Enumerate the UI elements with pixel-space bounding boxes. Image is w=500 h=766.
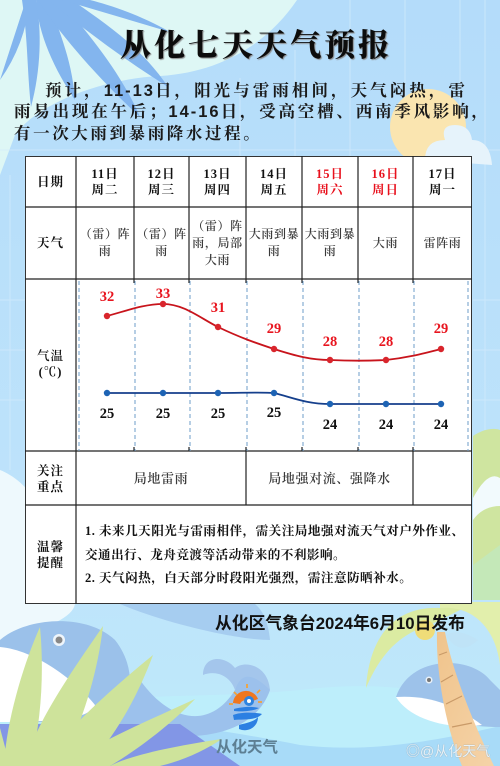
row: key focus xyxy=(37,464,391,494)
row: tips xyxy=(37,524,464,585)
row: tips: 1. 未来几天阳光与雷雨相伴，需关注局地强对流天气对户外作业、 xyxy=(85,524,464,538)
high temperature line: 28 xyxy=(323,334,337,350)
low temperature line: 24 xyxy=(379,417,393,433)
row: weather: 天气 xyxy=(37,236,64,250)
row: weather: （雷）阵雨 xyxy=(80,227,130,258)
high temperature line: 31 xyxy=(211,300,225,316)
palm leaf top left xyxy=(0,0,170,117)
issuer line: 从化区气象台2024年6月10日发布 xyxy=(215,614,465,633)
row: weather: 雷阵雨 xyxy=(424,236,461,250)
lower waves xyxy=(0,686,500,766)
row: weather: （雷）阵雨，局部大雨 xyxy=(192,218,243,266)
low temperature line: 25 xyxy=(211,406,225,422)
row label: temperature xyxy=(37,349,64,379)
watermark: ◎@从化天气 xyxy=(406,743,490,759)
row: key focus: 局地强对流、强降水 xyxy=(268,471,391,486)
row: date: 周二 xyxy=(91,182,118,196)
intro text: 雨易出现在午后；14-16日，受高空槽、西南季风影响， xyxy=(14,102,491,121)
intro text xyxy=(14,81,491,143)
agave leaves xyxy=(0,626,222,766)
row: tips: 温馨 xyxy=(37,540,64,554)
row: weather xyxy=(37,218,461,266)
row: date: 周六 xyxy=(316,182,344,196)
high temperature line: 33 xyxy=(156,286,170,302)
row: date: 周四 xyxy=(204,182,231,196)
intro text: 有一次大雨到暴雨降水过程。 xyxy=(14,124,262,143)
whale right xyxy=(396,663,500,727)
high temperature line: 29 xyxy=(267,321,281,337)
low temperature line: 24 xyxy=(323,417,337,433)
temperature line chart xyxy=(100,286,448,433)
high temperature line: 29 xyxy=(434,321,448,337)
left white dome xyxy=(0,470,75,640)
intro text: 预计，11-13日，阳光与雷雨相间，天气闷热，雷 xyxy=(45,81,468,100)
row: date: 日期 xyxy=(37,174,64,188)
row: date: 周日 xyxy=(372,182,399,196)
row: key focus: 关注 xyxy=(37,464,64,478)
low temperature line: 25 xyxy=(156,406,170,422)
row: date: 15日 xyxy=(316,166,344,180)
row: date xyxy=(37,166,456,196)
palm tree xyxy=(366,602,500,766)
logo icon xyxy=(229,684,262,730)
row: date: 12日 xyxy=(147,166,176,180)
row: tips: 提醒 xyxy=(37,556,64,570)
row: weather: 大雨到暴雨 xyxy=(305,227,355,258)
sun xyxy=(390,89,466,165)
row: date: 16日 xyxy=(371,166,400,180)
logo text: 从化天气 xyxy=(216,739,278,756)
pale corner shape xyxy=(0,0,297,175)
row: date: 17日 xyxy=(428,166,456,180)
cloud top right xyxy=(425,125,492,165)
forecast table xyxy=(25,156,472,604)
row: tips: 2. 天气闷热，白天部分时段阳光强烈，需注意防晒补水。 xyxy=(85,571,412,585)
low temperature line xyxy=(100,390,448,433)
low temperature line: 25 xyxy=(100,406,114,422)
title: 从化七天天气预报 xyxy=(120,28,392,63)
high temperature line: 28 xyxy=(379,334,393,350)
row label: temperature: 气温 xyxy=(37,349,64,363)
high temperature line: 32 xyxy=(100,289,114,305)
row: date: 周一 xyxy=(429,182,456,196)
low temperature line: 25 xyxy=(267,405,281,421)
whale left xyxy=(0,621,130,722)
high temperature line xyxy=(100,286,448,363)
row: date: 13日 xyxy=(203,166,232,180)
row: tips: 交通出行、龙舟竞渡等活动带来的不利影响。 xyxy=(85,548,346,562)
row: key focus: 重点 xyxy=(37,480,64,494)
row: date: 14日 xyxy=(260,166,288,180)
right palm fronds xyxy=(473,429,500,590)
row: key focus: 局地雷雨 xyxy=(134,471,188,486)
row: weather: 大雨到暴雨 xyxy=(249,227,299,258)
row: date: 11日 xyxy=(91,166,119,180)
low temperature line: 24 xyxy=(434,417,448,433)
row label: temperature: (℃) xyxy=(39,365,62,379)
row: weather: 大雨 xyxy=(373,236,398,250)
row: weather: （雷）阵雨 xyxy=(136,227,187,258)
row: date: 周三 xyxy=(148,182,175,196)
row: date: 周五 xyxy=(260,182,288,196)
